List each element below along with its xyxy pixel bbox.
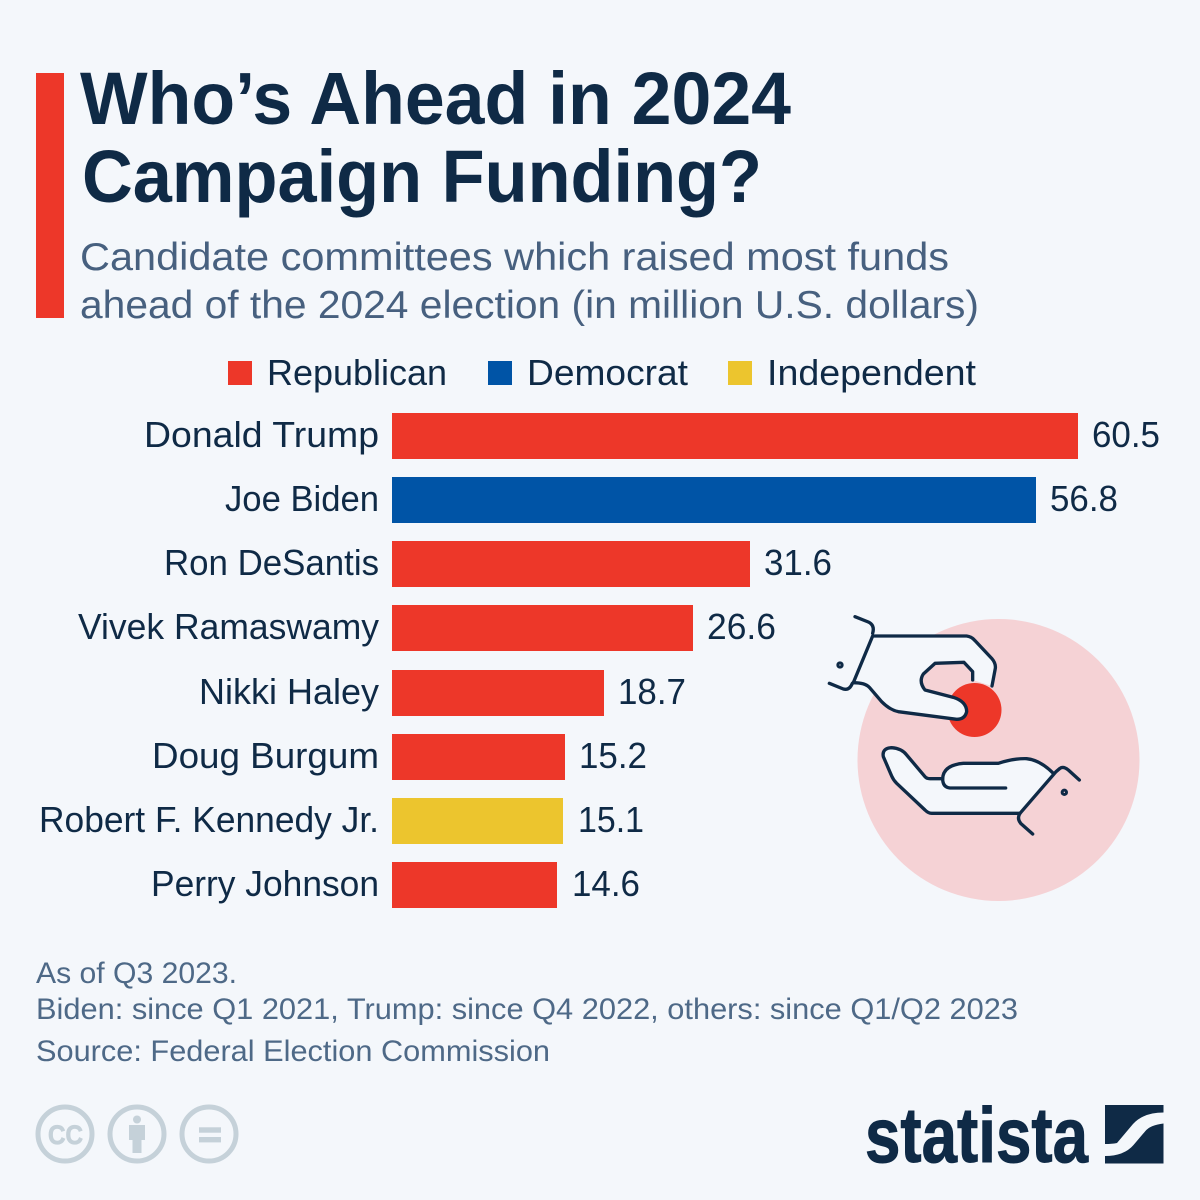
bar chart: [39, 413, 1160, 908]
icon: creative commons licence: CC: [48, 1120, 83, 1150]
subtitle: [80, 236, 979, 327]
row: Ron DeSantis: Ron DeSantis: [164, 542, 379, 583]
footnote: Source: Federal Election Commission: [36, 1035, 550, 1068]
subtitle: Candidate committees which raised most funds: [80, 236, 949, 279]
row: Vivek Ramaswamy: Vivek Ramaswamy: [78, 606, 379, 647]
row: Joe Biden: Joe Biden: [225, 478, 379, 519]
legend: [228, 352, 976, 393]
row: Doug Burgum: Doug Burgum: [152, 735, 379, 776]
row: Doug Burgum: [152, 734, 647, 780]
row: Perry Johnson: [151, 862, 640, 908]
row: Ron DeSantis: [164, 541, 832, 587]
footnote: [36, 957, 1018, 1068]
row: Vivek Ramaswamy: [78, 605, 776, 651]
row: Perry Johnson: 14.6: [572, 863, 640, 904]
subtitle: ahead of the 2024 election (in million U.S. dollars): [80, 284, 979, 327]
footnote: Biden: since Q1 2021, Trump: since Q4 2022, others: since Q1/Q2 2023: [36, 993, 1018, 1026]
row: Perry Johnson: Perry Johnson: [151, 863, 379, 904]
title: [80, 57, 791, 218]
legend: Republican: [267, 352, 447, 393]
title: Campaign Funding?: [82, 135, 762, 218]
row: Joe Biden: [225, 477, 1118, 523]
row: Donald Trump: 60.5: [1092, 414, 1160, 455]
title: Who’s Ahead in 2024: [80, 57, 791, 140]
icon: creative commons licence: [38, 1107, 236, 1161]
row: Nikki Haley: [199, 670, 686, 716]
row: Donald Trump: Donald Trump: [144, 414, 379, 455]
row: Ron DeSantis: 31.6: [764, 542, 832, 583]
legend: Democrat: [527, 352, 688, 393]
row: Nikki Haley: Nikki Haley: [199, 671, 379, 712]
row: Nikki Haley: 18.7: [618, 671, 686, 712]
legend: Independent: [767, 352, 976, 393]
row: Joe Biden: 56.8: [1050, 478, 1118, 519]
icon: hands exchanging coin: [829, 617, 1140, 901]
row: Donald Trump: [144, 413, 1160, 459]
row: Robert F. Kennedy Jr.: [39, 798, 644, 844]
row: Robert F. Kennedy Jr.: Robert F. Kennedy Jr.: [39, 799, 379, 840]
footnote: As of Q3 2023.: [36, 957, 237, 990]
logo: statista: statista: [865, 1091, 1088, 1179]
accent bar: [36, 73, 64, 318]
row: Doug Burgum: 15.2: [579, 735, 647, 776]
row: Vivek Ramaswamy: 26.6: [707, 606, 776, 647]
row: Robert F. Kennedy Jr.: 15.1: [578, 799, 644, 840]
